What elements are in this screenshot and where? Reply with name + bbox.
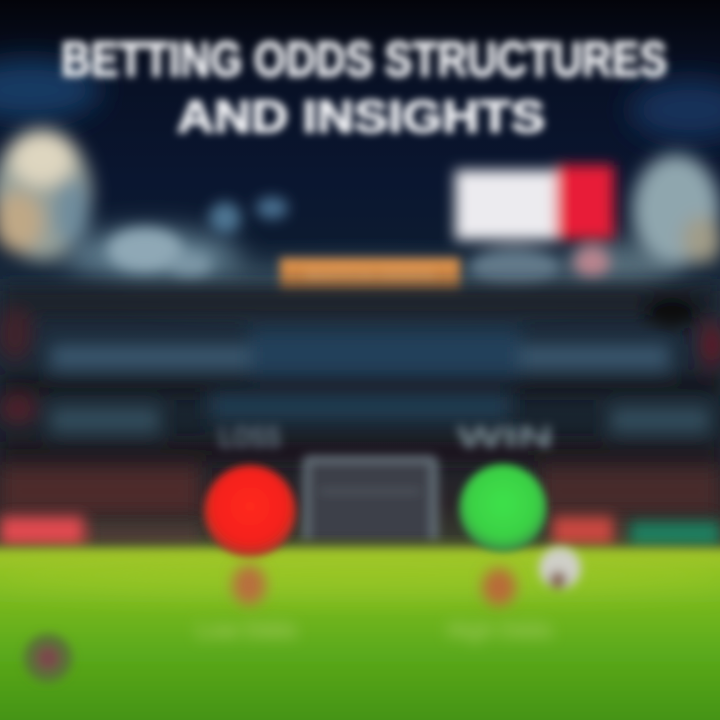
pitch lighter band xyxy=(0,553,720,597)
stand tiers xyxy=(0,285,720,514)
column heading: right: WIN xyxy=(457,421,553,454)
banner label: MATCH ODDS xyxy=(306,267,434,288)
title xyxy=(61,33,667,142)
small sky highlights xyxy=(107,197,288,279)
left floodlight dome xyxy=(0,129,92,261)
advertising boards xyxy=(0,516,720,546)
column heading: left: LOSS xyxy=(219,421,281,454)
green ball icon xyxy=(459,464,547,552)
corner badge icon xyxy=(24,634,72,682)
soccer ball xyxy=(539,547,581,589)
sky glow xyxy=(0,60,720,305)
title: AND INSIGHTS xyxy=(177,91,545,142)
orange banner xyxy=(280,258,460,294)
pitch xyxy=(0,548,720,720)
right floodlight dome xyxy=(632,154,720,266)
goal xyxy=(303,456,438,540)
green marker stem xyxy=(482,568,516,606)
red ball icon xyxy=(204,465,296,557)
red marker stem xyxy=(232,565,266,605)
flag panel xyxy=(455,165,614,288)
right caption: High Odds xyxy=(448,617,552,644)
left caption: Low Odds xyxy=(197,617,297,644)
